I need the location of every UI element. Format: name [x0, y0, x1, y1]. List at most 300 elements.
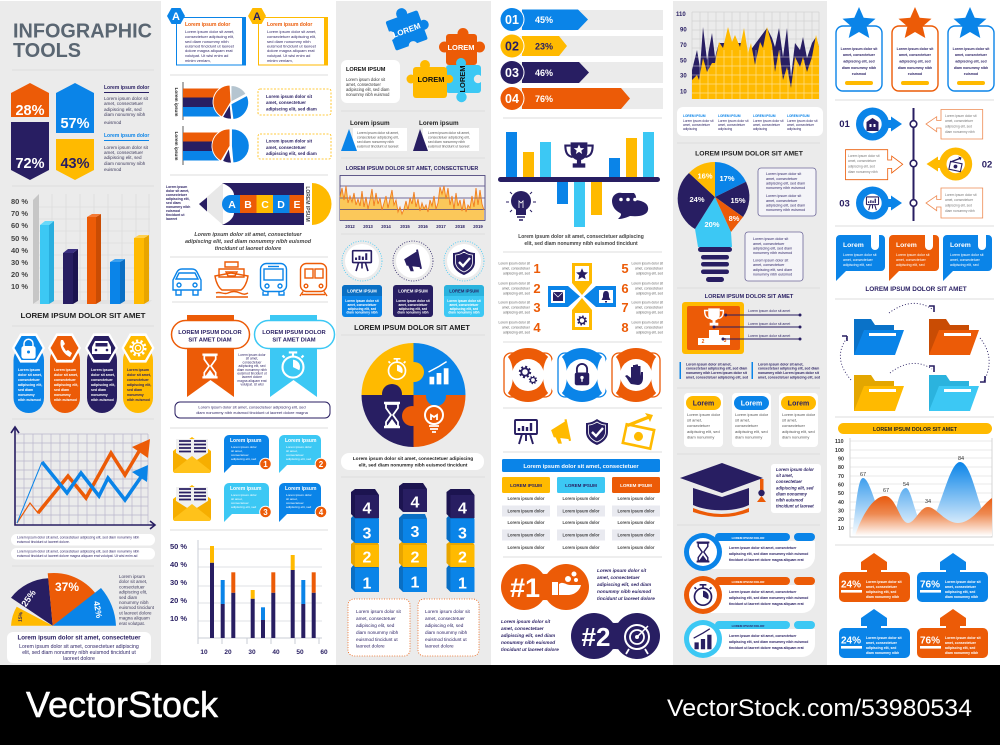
icon: train — [300, 264, 327, 296]
text block: pie chart note: consectetuer — [119, 584, 145, 589]
blue hexagon 57%: 57% — [60, 116, 90, 132]
pill: phone: adipiscing elit, — [54, 383, 78, 387]
text block: #2 note: adipiscing elit, sed diam — [501, 633, 555, 638]
list card: bars: tincidunt ut laoreet dolore magna aliquam erat — [729, 646, 804, 650]
progress row 04: 04 — [505, 92, 519, 106]
pill: car: sed diam — [91, 388, 106, 392]
bar chart: up and down with icons — [498, 132, 660, 227]
stack: numbered blocks centre — [399, 483, 427, 592]
panel: bulb note 1 — [758, 168, 816, 216]
text block: percentages second note: euismod — [104, 167, 122, 172]
pill: lock: Lorem ipsum — [18, 368, 40, 372]
callout: dashed note 1: adipiscing elit, sed diam — [266, 106, 317, 112]
pencil: A to E: C — [261, 199, 269, 211]
callout: dashed note 2 — [258, 134, 331, 159]
icon: bus — [260, 264, 286, 295]
cross shape — [548, 263, 616, 330]
panel: pie chart caption: Lorem ipsum dolor sit amet, consectetuer — [17, 634, 141, 642]
panel: area chart legend: adipiscing — [753, 127, 767, 131]
table: Lorem ipsum dolor — [507, 532, 545, 538]
callout: bubble 1 — [224, 435, 271, 473]
card: arrow 24% blue — [839, 609, 910, 658]
table: Lorem ipsum dolor — [562, 532, 600, 538]
panel: area chart legend: LOREM IPSUM — [718, 114, 741, 118]
icon: folder orange — [929, 319, 979, 355]
text block: pie chart note: euismod tincidunt — [119, 605, 155, 610]
text block: pie chart note: erat volutpat. — [119, 621, 145, 626]
badge: #2 — [571, 613, 660, 659]
card: yellow Lorem 2: diam nonummy — [782, 434, 809, 440]
panel: puzzle circle caption: Lorem ipsum dolor sit amet, consectetuer adipiscing — [353, 456, 473, 462]
footer: VectorStock band: VectorStock.com/53980534 — [667, 695, 972, 722]
table: Lorem ipsum dolor — [617, 496, 655, 501]
chart: bar and pie row 1 — [174, 82, 249, 120]
text block: pie chart note: dolor sit amet, — [119, 579, 147, 584]
panel: trophy podium: Lorem ipsum dolor sit amet — [748, 334, 790, 338]
text block: pencil caption — [185, 232, 312, 252]
callout: bubble 1: consectetuer — [231, 453, 249, 457]
numbers right: 6 — [621, 281, 629, 296]
panel: pie chart caption — [7, 632, 151, 663]
list card: hourglass — [684, 533, 815, 571]
timeline step 02: adipiscing elit, sed — [848, 164, 875, 168]
text block: pie chart note: ut laoreet dolore — [119, 610, 152, 615]
progress row 03 — [500, 60, 589, 85]
card: yellow Lorem 2: Lorem — [788, 400, 809, 408]
title: INFOGRAPHIC — [13, 20, 152, 42]
callout: blue notched bubble 2: Lorem ipsum dolor sit — [950, 253, 983, 257]
text block: ribbons middle note: Lorem ipsum dolor — [238, 353, 267, 357]
notes left — [498, 262, 531, 334]
pencil: A to E: D — [277, 199, 285, 211]
pill: gear: sed diam — [127, 388, 142, 392]
panel: triangle note 1: consectetuer adipiscing elit, — [357, 136, 399, 140]
area chart: mountain curves: 70 — [838, 474, 844, 480]
text block: trophy right note: amet, consectetuer adipiscing elit, sed — [758, 376, 820, 380]
panel: cyan label card: Lorem ipsum dolor sit — [447, 299, 482, 303]
timeline step 03: diam nonummy nibh — [945, 209, 975, 213]
panel: triangle note 2: Lorem ipsum dolor sit amet, — [428, 131, 470, 135]
progress row 02: 02 — [505, 40, 519, 54]
callout: bubble 1: sit amet, — [231, 449, 243, 453]
text block: trophy right note: nonummy nibh Lorem ipsum dolor sit — [758, 371, 820, 375]
timeline step 02: Lorem ipsum dolor sit — [848, 154, 880, 158]
title — [13, 20, 152, 62]
pill: car: consectetuer — [91, 378, 113, 382]
table: Lorem ipsum dolor — [507, 508, 545, 514]
heading: yellow pill title — [838, 423, 992, 434]
panel: triangle note 1: Lorem ipsum — [350, 120, 390, 127]
area chart: mountain curves: 30 — [838, 508, 844, 514]
card: yellow Lorem: sit amet, — [687, 418, 702, 422]
panel: area chart legend: amet, consectetuer — [718, 123, 746, 127]
text block: percentages second note: adipiscing elit, sed — [104, 155, 142, 160]
panel: icon pills — [12, 333, 155, 413]
timeline step 03: amet, consectetuer — [945, 198, 974, 202]
text block: pencil caption: tincidunt ut laoreet dolore — [215, 246, 281, 252]
panel: area chart legend: adipiscing — [718, 127, 732, 131]
text block: bars caption — [518, 234, 644, 247]
text block: pie chart note: nonummy nibh — [119, 600, 149, 605]
callout: bubble 4: consectetuer — [286, 501, 304, 505]
card: yellow Lorem 2 — [779, 393, 818, 447]
text block: bars caption: elit, sed diam nonummy nibh euismod tincidunt — [524, 241, 638, 247]
stack: numbered blocks right: 1 — [458, 576, 467, 592]
chart: bar and pie row 2 — [174, 126, 249, 165]
notes left: amet, consectetuer — [502, 286, 531, 290]
icon: ship — [215, 262, 248, 297]
pill: phone: sed diam — [54, 388, 69, 392]
text block: #1 note: nonummy nibh euismod — [597, 589, 651, 594]
callout: yellow A: minim veniam, — [267, 58, 293, 63]
timeline step 01: Lorem ipsum dolor sit — [945, 114, 977, 118]
card: yellow Lorem: Lorem ipsum dolor — [687, 412, 721, 417]
progress row 01 — [500, 7, 588, 32]
star card 1: Lorem ipsum dolor sit — [841, 47, 878, 51]
notes left: Lorem ipsum dolor sit — [498, 282, 530, 286]
panel: graduation note: diam nonummy — [776, 492, 808, 496]
area chart: mountain curves: 67 — [883, 488, 889, 494]
pill: gear: dolor sit amet, — [127, 373, 151, 377]
card: arrow 76% orange: amet, consectetuer — [945, 641, 977, 645]
pill: gear: adipiscing elit, — [127, 383, 151, 387]
notes right — [631, 262, 664, 334]
card: blue Lorem: Lorem — [741, 400, 762, 408]
callout: blue notched bubble 2: adipiscing elit, sed — [950, 263, 979, 267]
text block: pencil note: laoreet — [166, 217, 178, 221]
timeline step 01: diam nonummy nibh — [945, 130, 975, 134]
timeline step 01 — [839, 108, 983, 140]
stack: numbered blocks left — [351, 489, 379, 592]
heading: time series: LOREM IPSUM DOLOR SIT AMET, CONSECTETUER — [346, 166, 478, 172]
panel: pie chart caption: Lorem ipsum dolor sit amet, consectetuer adipiscing — [19, 644, 139, 650]
callout: yellow A: euismod tincidunt ut laoreet — [267, 44, 317, 48]
pill: phone: nibh euismod — [54, 398, 77, 402]
progress row 02: 23% — [535, 42, 553, 52]
notes left: Lorem ipsum dolor sit — [498, 262, 530, 266]
text block: trophy left note: consectetuer adipiscing elit, sed diam — [686, 366, 747, 370]
card: yellow Lorem: consectetuer — [687, 423, 711, 428]
pill: lock: sed diam — [18, 388, 33, 392]
pencil: A to E: B — [244, 199, 252, 211]
star card 3: amet, consectetuer — [955, 53, 988, 57]
icon: presentation badge — [342, 241, 382, 281]
puzzle: four pieces — [379, 1, 485, 102]
panel: bulb note 2: amet, consectetuer — [753, 263, 785, 267]
ribbon: orange hourglass: SIT AMET DIAM — [188, 338, 232, 344]
panel: triangle note 1: euismod tincidunt ut laoreet — [357, 144, 399, 148]
notes right: adipiscing elit, sed — [636, 272, 663, 276]
text block: percentages first note — [104, 85, 149, 125]
orange hexagon 28%: 28% — [15, 103, 45, 119]
panel: area chart legend: adipiscing — [683, 127, 697, 131]
pill: car: dolor sit amet, — [91, 373, 115, 377]
pill: phone: Lorem ipsum — [54, 368, 76, 372]
pencil: A to E: LOREM IPSUM — [304, 186, 310, 222]
text block: #1 note — [597, 568, 655, 601]
text block: trophy right note: Lorem ipsum dolor sit amet, — [758, 362, 803, 366]
panel: cyan label card: LOREM IPSUM — [449, 288, 479, 294]
panel: bulb note 1: Lorem ipsum dolor sit — [766, 172, 801, 176]
callout: bubble 3 — [224, 483, 271, 522]
heading: trophy panel: LOREM IPSUM DOLOR SIT AMET — [705, 294, 794, 300]
star card 1 — [836, 7, 882, 91]
callout: yellow A: A — [253, 11, 261, 23]
card: arrow 76% orange: Lorem ipsum dolor sit — [945, 636, 981, 640]
panel: bulb note 1: adipiscing elit, sed diam — [766, 204, 805, 208]
list card: stopwatch: adipiscing elit, sed diam nonummy nibh euismod — [729, 596, 808, 600]
callout: yellow A: Lorem ipsum dolor sit amet, — [267, 29, 316, 34]
callout: blue notched bubble: adipiscing elit, sed — [843, 263, 872, 267]
bar chart: 3D bars — [11, 194, 152, 304]
table: Lorem ipsum dolor — [617, 508, 655, 514]
list card: stopwatch: LOREM IPSUM DOLOR — [732, 580, 765, 584]
table: Lorem ipsum dolor — [562, 496, 600, 501]
icon: presentation — [515, 420, 537, 444]
stack: numbered blocks left: 2 — [363, 550, 372, 566]
callout: blue notched bubble: Lorem ipsum dolor sit — [843, 253, 876, 257]
panel: pie chart caption: elit, sed diam nonummy nibh euismod tincidunt ut — [22, 650, 136, 656]
pie chart: fan sectors — [11, 573, 116, 626]
panel: puzzle note — [341, 60, 400, 103]
panel: bulb note 2: adipiscing elit, sed diam — [753, 268, 792, 272]
text block: pencil note: dolor sit amet, — [166, 189, 189, 193]
panel: bulb note 2: Lorem ipsum dolor sit — [753, 258, 788, 262]
card: arrow 24% blue: adipiscing elit, sed — [866, 646, 896, 650]
stack: numbered blocks right: 3 — [458, 526, 467, 542]
puzzle circle — [362, 343, 466, 447]
callout: blue A: sed diam nonummy nibh — [185, 39, 229, 44]
star card 2 — [892, 7, 938, 91]
callout: bubble 3: sit amet, — [231, 497, 243, 501]
icon: envelope 2 — [173, 485, 211, 521]
area chart: mountain curves: 110 — [835, 439, 844, 445]
text block: percentages second note: amet, consectetuer — [104, 150, 144, 155]
callout: ribbons caption: diam nonummy nibh euismod tincidunt ut laoreet dolore magna — [196, 410, 309, 415]
lifebuoy: gears — [495, 348, 561, 402]
progress bars — [500, 7, 663, 111]
area chart: time series 2012-2019: 2016 — [418, 224, 428, 229]
panel: blue label card: adipiscing elit, sed — [348, 307, 376, 311]
table: Lorem ipsum dolor — [562, 545, 600, 550]
progress row 03: 03 — [505, 66, 519, 80]
area chart: mountain curves: 60 — [838, 482, 844, 488]
star card 2: amet, consectetuer — [899, 53, 932, 57]
callout: bubble 2: consectetuer — [286, 453, 304, 457]
area chart: mountain curves: 54 — [903, 482, 909, 488]
panel: puzzle circle caption — [341, 453, 484, 470]
card: arrow 24% orange: diam nonummy nibh — [866, 595, 899, 599]
panel: bulb note 2: Lorem ipsum dolor sit — [753, 237, 788, 241]
star card 3: Lorem ipsum dolor sit — [953, 47, 990, 51]
panel: puzzle note: LOREM IPSUM — [346, 67, 386, 73]
panel: bulb note 2: amet, consectetuer — [753, 242, 785, 246]
card: blue Lorem: adipiscing elit, sed — [735, 429, 768, 434]
callout: bubble 4: 4 — [319, 508, 324, 517]
notes right: Lorem ipsum dolor sit — [631, 282, 663, 286]
panel: graduation note: Lorem ipsum dolor — [776, 467, 814, 472]
text block: #1 note: adipiscing elit, sed diam — [597, 582, 651, 587]
badge: #1 — [501, 564, 589, 610]
panel: navy label card: diam nonummy nibh — [397, 310, 429, 314]
text block: trophy left note — [680, 362, 748, 380]
ribbon: orange hourglass: LOREM IPSUM DOLOR — [178, 330, 243, 336]
area chart: time series 2012-2019: 2013 — [363, 224, 373, 229]
text block: pencil note: consectetuer — [166, 193, 188, 197]
icon: light bulb — [506, 191, 536, 220]
icon: folder blue — [854, 319, 904, 355]
text block: pencil caption: Lorem ipsum dolor sit amet, consectetuer — [194, 232, 303, 238]
panel: blue label card: amet, consectetuer — [347, 303, 377, 307]
table: Lorem ipsum dolor — [617, 520, 655, 525]
notes left: Lorem ipsum dolor sit — [498, 320, 530, 324]
icon: folder yellow — [854, 375, 904, 411]
star card 2: Lorem ipsum dolor sit — [897, 47, 934, 51]
icon: car — [173, 269, 201, 295]
callout: orange notched bubble: Lorem ipsum dolor sit — [896, 253, 929, 257]
timeline step 02: 02 — [982, 160, 992, 170]
panel: dotted note 2: Lorem ipsum dolor sit — [425, 609, 471, 614]
text block: pencil note: adipiscing elit, — [166, 197, 190, 201]
bar chart: stacked bars: 40 — [272, 649, 280, 656]
table: Lorem ipsum dolor — [617, 545, 655, 550]
icon: speech bubble — [612, 193, 648, 219]
panel: percentage hexagons — [11, 83, 149, 180]
progress row 03: 46% — [535, 68, 553, 78]
text block: percentages second note — [104, 133, 149, 172]
text block: pie chart note: sed diam — [119, 595, 138, 600]
text block: #1 note: Lorem ipsum dolor sit — [597, 568, 647, 573]
panel: dotted note 2 — [418, 599, 479, 656]
icon: envelope 1 — [173, 437, 211, 473]
callout: yellow A: sed diam nonummy nibh — [267, 39, 311, 44]
card: blue Lorem: diam nonummy — [735, 434, 762, 440]
text block: pie chart note: Lorem ipsum — [119, 574, 145, 579]
notes left: adipiscing elit, sed — [503, 292, 530, 296]
pie chart: fan sectors: 42% — [92, 600, 104, 619]
text block: ribbons middle note: laoreet dolore — [242, 375, 262, 379]
progress row 02 — [500, 34, 567, 58]
callout: orange notched bubble: amet, consectetuer — [896, 258, 927, 262]
lifebuoy: hand — [603, 348, 669, 402]
callout: blue A: euismod tincidunt ut laoreet — [185, 44, 235, 48]
footer: VectorStock band — [0, 665, 1000, 745]
stack: numbered blocks left: 3 — [363, 526, 372, 542]
panel: bulb note 1: amet, consectetuer — [766, 177, 798, 181]
panel: navy label card: amet, consectetuer — [398, 303, 428, 307]
notes right: Lorem ipsum dolor sit — [631, 320, 663, 324]
star card 2: diam nonummy nibh — [898, 66, 932, 70]
notes right: adipiscing elit, sed — [636, 292, 663, 296]
callout: bubble 2: Lorem ipsum — [285, 438, 317, 444]
callout: bubble 2: Lorem ipsum dolor — [286, 445, 312, 449]
pill: lock: nibh euismod — [18, 398, 41, 402]
table: Lorem ipsum dolor — [507, 520, 545, 525]
bar chart: 3D bars: 20 % — [11, 270, 28, 279]
puzzle piece: yellow: LOREM — [417, 75, 445, 84]
text block: line chart notes: euismod tincidunt ut laoreet dolore. — [17, 540, 70, 544]
text block: trophy right note: consectetuer adipiscing elit, sed diam — [758, 366, 819, 370]
puzzle piece: blue: LOREM — [392, 21, 422, 40]
notes left: adipiscing elit, sed — [503, 272, 530, 276]
pill: gear: nonummy — [127, 393, 144, 397]
badge: #1: #1 — [510, 573, 540, 603]
bar chart: stacked bars: 20 — [224, 649, 232, 656]
notes left: amet, consectetuer — [502, 306, 531, 310]
panel: bulb note 2: nonummy nibh euismod — [753, 272, 792, 276]
pill: lock — [12, 333, 45, 413]
panel: dotted note 2: diam nonummy nibh — [425, 630, 468, 635]
timeline step 03: 03 — [839, 198, 850, 210]
text block: ribbons middle note: sit amet, — [246, 357, 258, 361]
card: arrow 76% blue — [917, 553, 988, 602]
panel: dotted note 1: adipiscing elit, sed — [356, 623, 395, 628]
callout: yellow A: dolore magna aliquam erat — [267, 48, 315, 53]
ribbon: cyan stopwatch: SIT AMET DIAM — [272, 338, 316, 344]
bar chart: 3D bars: 70 % — [11, 209, 28, 218]
callout: bubble 3: consectetuer — [231, 501, 249, 505]
heading: column 3: LOREM IPSUM DOLOR SIT AMET — [354, 323, 470, 332]
text block: ribbons middle note: consectetuer — [243, 360, 262, 364]
text block: pie chart note: adipiscing elit, — [119, 590, 147, 595]
card: yellow Lorem: adipiscing elit, sed — [687, 429, 720, 434]
panel: bulb note 1: amet, consectetuer — [766, 199, 798, 203]
pill: gear — [121, 333, 155, 413]
text block: percentages first note: adipiscing elit, sed — [104, 107, 142, 112]
callout: bubble 1: Lorem ipsum — [230, 438, 262, 444]
title: TOOLS — [13, 40, 81, 62]
bar chart: stacked bars: 30 % — [170, 578, 187, 587]
stack: numbered blocks left: 1 — [363, 576, 372, 592]
panel: bulb note 1: nonummy nibh euismod — [766, 208, 805, 212]
callout: dashed note 1 — [258, 89, 331, 115]
notes right: adipiscing elit, sed — [636, 330, 663, 334]
area chart: time series 2012-2019: 2015 — [400, 224, 410, 229]
card: arrow 24% orange: adipiscing elit, sed — [866, 590, 896, 594]
callout: blue A: minim veniam, — [185, 58, 211, 63]
callout: bubble 3: Lorem ipsum — [230, 486, 262, 492]
list card: hourglass: LOREM IPSUM DOLOR — [732, 536, 765, 540]
callout: bubble 1: Lorem ipsum dolor — [231, 445, 257, 449]
pie chart: fan sectors: 25% — [19, 588, 38, 609]
callout: bubble 2: 2 — [319, 460, 324, 469]
panel: dotted note 2: amet, consectetuer — [425, 616, 465, 621]
area chart: mountain curves: 40 — [838, 500, 844, 506]
text block: #1 note: amet, consectetuer — [597, 575, 641, 580]
pill: lock: adipiscing elit, — [18, 383, 42, 387]
notes right: Lorem ipsum dolor sit — [631, 300, 663, 304]
panel: navy label card — [393, 285, 433, 317]
panel: navy label card: LOREM IPSUM — [398, 288, 428, 294]
icon: money — [623, 413, 654, 449]
area chart: time series 2012-2019 — [340, 176, 485, 229]
puzzle piece: orange: LOREM — [447, 43, 475, 52]
callout: blue notched bubble 2 — [943, 235, 992, 281]
numbers left — [533, 261, 541, 335]
pill: lock: dolor sit amet, — [18, 373, 42, 377]
pie chart: light bulb — [678, 162, 749, 282]
area chart: mountain curves: 80 — [838, 465, 844, 471]
list card: hourglass: adipiscing elit, sed diam nonummy nibh euismod — [729, 552, 808, 556]
card: yellow Lorem 2: sit amet, — [782, 418, 797, 422]
icon: shield badge — [444, 241, 484, 281]
bar chart: stacked bars: 10 % — [170, 614, 187, 623]
notes right: amet, consectetuer — [635, 286, 664, 290]
card: blue Lorem: consectetuer — [735, 423, 759, 428]
table: Lorem ipsum dolor sit amet, consectetuer — [523, 464, 639, 470]
pill: car: Lorem ipsum — [91, 368, 113, 372]
callout: blue A: A — [172, 11, 180, 23]
